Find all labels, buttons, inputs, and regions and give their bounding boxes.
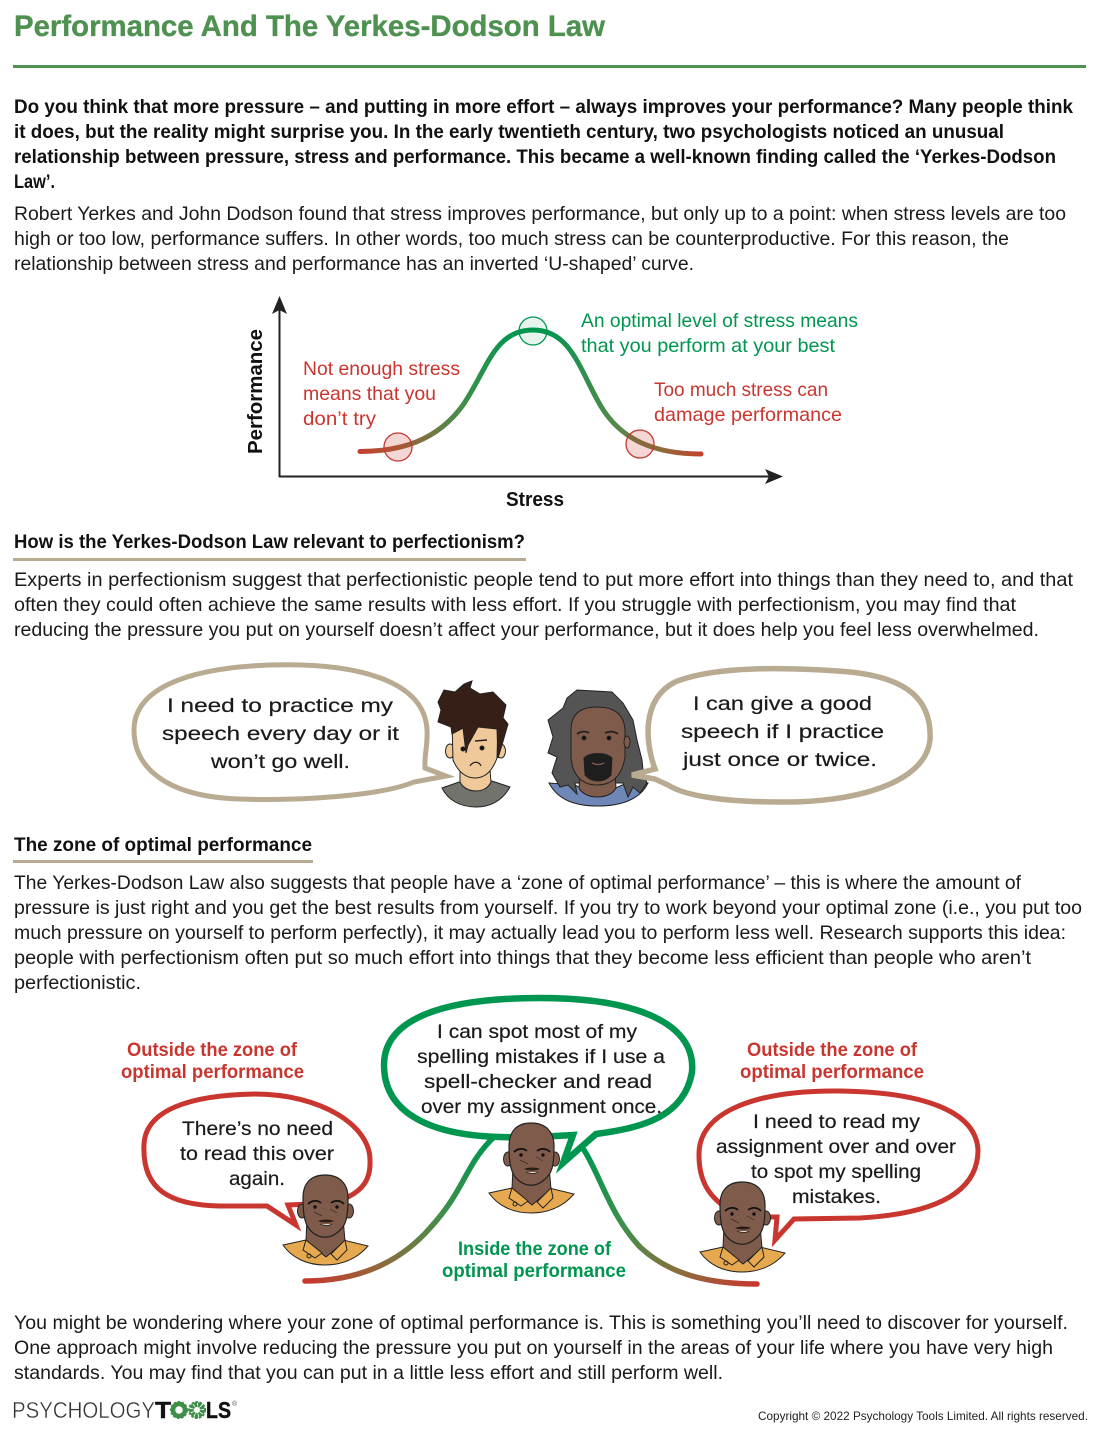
speech bubble: once or twice: I can give a good [693,693,872,715]
character: optimal man [489,1123,574,1213]
label: outside zone right: optimal performance [740,1062,924,1083]
speech bubble: spell-checker: spell-checker and read [424,1071,652,1093]
intro paragraph (bold): it does, but the reality might surprise you. In the early twentieth century, two psychologists noticed an unusual [14,121,1004,143]
label: outside zone left [121,1040,304,1083]
closing paragraph: You might be wondering where your zone of optimal performance is. This is something you’ll need to discover for yourself. [14,1312,1068,1334]
character: relaxed man [283,1175,368,1265]
title: Performance And The Yerkes-Dodson Law [14,10,606,43]
intro paragraph (bold): Law’. [14,171,55,193]
label: inside zone [442,1239,626,1282]
speech bubble: read over and over: I need to read my [753,1111,920,1133]
label: outside zone right: Outside the zone of [747,1040,918,1061]
character: overworking man [700,1182,785,1272]
title rule [13,65,1086,68]
perfectionism paragraph: Experts in perfectionism suggest that perfectionistic people tend to put more effort into things than they need to, and that [14,569,1074,591]
label: not enough stress: don’t try [303,408,376,430]
label: too much stress: Too much stress can [654,379,828,401]
marker: low stress [384,433,412,461]
speech bubble: read over and over: mistakes. [792,1186,881,1208]
y axis label: Performance [245,329,267,454]
x axis [279,469,783,484]
speech bubble: practice every day [134,665,446,799]
speech bubble: read over and over: assignment over and over [716,1136,957,1158]
zone paragraph: people with perfectionism often put so much effort into things that they become less efficient than people who aren’t [14,947,1032,969]
label: not enough stress: Not enough stress [303,358,460,380]
explanation paragraph: high or too low, performance suffers. In other words, too much stress can be counterproductive. For this reason, the [14,228,1009,250]
label: optimal stress: that you perform at your best [581,335,836,357]
zone curve: left [305,1138,493,1281]
zone paragraph [14,872,1082,994]
closing paragraph: standards. You may find that you can put in a little less effort and still perform well. [14,1362,723,1384]
speech bubble: spell-checker: I can spot most of my [437,1021,637,1043]
speech bubble: once or twice: just once or twice. [682,749,877,771]
speech bubble: no need to read: to read this over [180,1143,335,1165]
speech bubble: once or twice: speech if I practice [681,721,884,743]
heading: zone of optimal performance: The zone of optimal performance [14,834,312,856]
label: optimal stress [581,310,858,357]
label: not enough stress [303,358,460,430]
zone paragraph: The Yerkes-Dodson Law also suggests that people have a ‘zone of optimal performance’ – this is where the amount of [14,872,1022,894]
zone paragraph: much pressure on yourself to perform perfectly), it may actually lead you to perform less well. Research supports this idea: [14,922,1066,944]
speech bubble: no need to read: again. [229,1168,285,1190]
explanation paragraph: Robert Yerkes and John Dodson found that stress improves performance, but only up to a point: when stress levels are too [14,203,1066,225]
copyright: Copyright © 2022 Psychology Tools Limited. All rights reserved. [758,1409,1088,1423]
closing paragraph: One approach might involve reducing the pressure you put on yourself in the areas of your life where you have very high [14,1337,1053,1359]
zone curve: right [584,1150,757,1284]
explanation paragraph: relationship between stress and performance has an inverted ‘U-shaped’ curve. [14,253,694,275]
intro paragraph (bold): Do you think that more pressure – and putting in more effort – always improves your performance? Many people think [14,96,1073,118]
intro paragraph (bold) [14,96,1073,193]
label: too much stress [654,379,842,426]
intro paragraph (bold): relationship between pressure, stress and performance. This became a well-known finding called the ‘Yerkes-Dodson [14,146,1056,168]
speech bubble: read over and over: to spot my spelling [751,1161,921,1183]
speech bubble: spell-checker: over my assignment once. [421,1096,662,1118]
heading: perfectionism: How is the Yerkes-Dodson Law relevant to perfectionism? [14,531,525,553]
logo: Psychology Tools: LS [206,1397,231,1423]
logo: Psychology Tools: ® [232,1400,238,1408]
label: not enough stress: means that you [303,383,436,405]
speech bubble: no need to read: There’s no need [182,1118,333,1140]
zone paragraph: pressure is just right and you get the best results from yourself. If you try to work beyond your optimal zone (i.e., you put too [14,897,1082,919]
label: inside zone: Inside the zone of [458,1239,612,1260]
x axis label: Stress [506,489,564,511]
label: outside zone left: optimal performance [121,1062,304,1083]
label: inside zone: optimal performance [442,1261,626,1282]
logo: Psychology Tools: PSYCHOLOGY [12,1397,155,1423]
label: optimal stress: An optimal level of stress means [581,310,858,332]
zone paragraph: perfectionistic. [14,972,141,994]
explanation paragraph [14,203,1066,275]
marker: high stress [626,430,654,458]
closing paragraph [14,1312,1068,1384]
speech bubble: practice every day: I need to practice my [167,695,393,717]
speech bubble: spell-checker: spelling mistakes if I use a [417,1046,665,1068]
speech bubble: practice every day: speech every day or it [162,723,400,745]
character: man with long hair [548,690,648,806]
marker: optimal [519,317,547,345]
y axis [272,296,287,477]
perfectionism paragraph: often they could often achieve the same results with less effort. If you struggle with perfectionism, you may find that [14,594,1017,616]
label: outside zone right [740,1040,924,1083]
performance curve [360,330,701,454]
label: too much stress: damage performance [654,404,842,426]
speech bubble: spell-checker [384,998,692,1163]
label: outside zone left: Outside the zone of [127,1040,298,1061]
speech bubble: practice every day: won’t go well. [210,751,350,773]
chart: inverted U curve [245,296,858,511]
logo: Psychology Tools: T [155,1397,171,1423]
speech bubble: no need to read [144,1094,370,1225]
character: worried young man [438,681,510,807]
perfectionism paragraph: reducing the pressure you put on yourself doesn’t affect your performance, but it does help you feel less overwhelmed. [14,619,1039,641]
speech bubble: read over and over [699,1091,978,1240]
perfectionism paragraph [14,569,1074,641]
speech bubble: once or twice [632,669,930,802]
